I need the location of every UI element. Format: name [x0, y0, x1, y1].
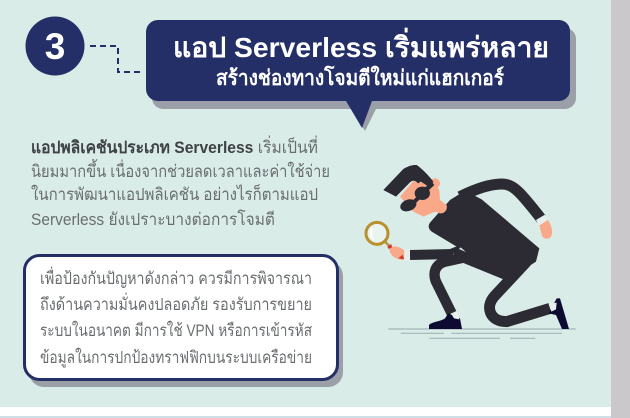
hacker illustration [366, 165, 576, 338]
hair [383, 165, 433, 197]
callout text: ข้อมูลในการปกป้องทราฟฟิกบนระบบเครือข่าย [40, 347, 312, 368]
intro paragraph: ในการพัฒนาแอปพลิเคชัน อย่างไรก็ตามแอป [31, 183, 318, 204]
front leg [435, 257, 465, 313]
front arm [410, 239, 453, 270]
neck and head [400, 178, 447, 217]
right side strip [611, 0, 630, 418]
callout text: เพื่อป้องกันปัญหาดังกล่าว ควรมีการพิจารณา [40, 266, 312, 288]
title line 2: สร้างช่องทางโจมตีใหม่แก่แฮกเกอร์ [216, 65, 505, 90]
front shoe [429, 313, 462, 329]
callout text: ระบบในอนาคต มีการใช้ VPN หรือการเข้ารหัส [40, 320, 312, 340]
title banner [146, 20, 576, 131]
intro paragraph: แอปพลิเคชันประเภท Serverless เริ่มเป็นที่ [31, 135, 318, 157]
back shoe [549, 298, 569, 329]
front hand [389, 246, 404, 260]
back cuff and hand [536, 215, 548, 226]
ground lines [388, 329, 576, 338]
magnifying glass [366, 222, 392, 249]
intro paragraph [31, 135, 330, 229]
title line 1: แอป Serverless เริ่มแพร่หลาย [173, 27, 549, 63]
bottom band [0, 407, 611, 418]
number badge: 3 [45, 26, 65, 67]
front cuff [403, 250, 410, 260]
intro paragraph: นิยมมากขึ้น เนื่องจากช่วยลดเวลาและค่าใช้จ่าย [31, 159, 330, 181]
callout text: ถึงด้านความมั่นคงปลอดภัย รองรับการขยาย [40, 292, 312, 314]
callout box [24, 256, 343, 387]
callout text [40, 266, 312, 368]
dashed connector [90, 46, 140, 72]
sunglasses [399, 182, 434, 214]
back arm [460, 184, 542, 219]
torso [429, 191, 539, 281]
back leg [490, 262, 550, 322]
number badge [26, 16, 84, 76]
intro paragraph: Serverless ยังเปราะบางต่อการโจมตี [31, 209, 275, 229]
